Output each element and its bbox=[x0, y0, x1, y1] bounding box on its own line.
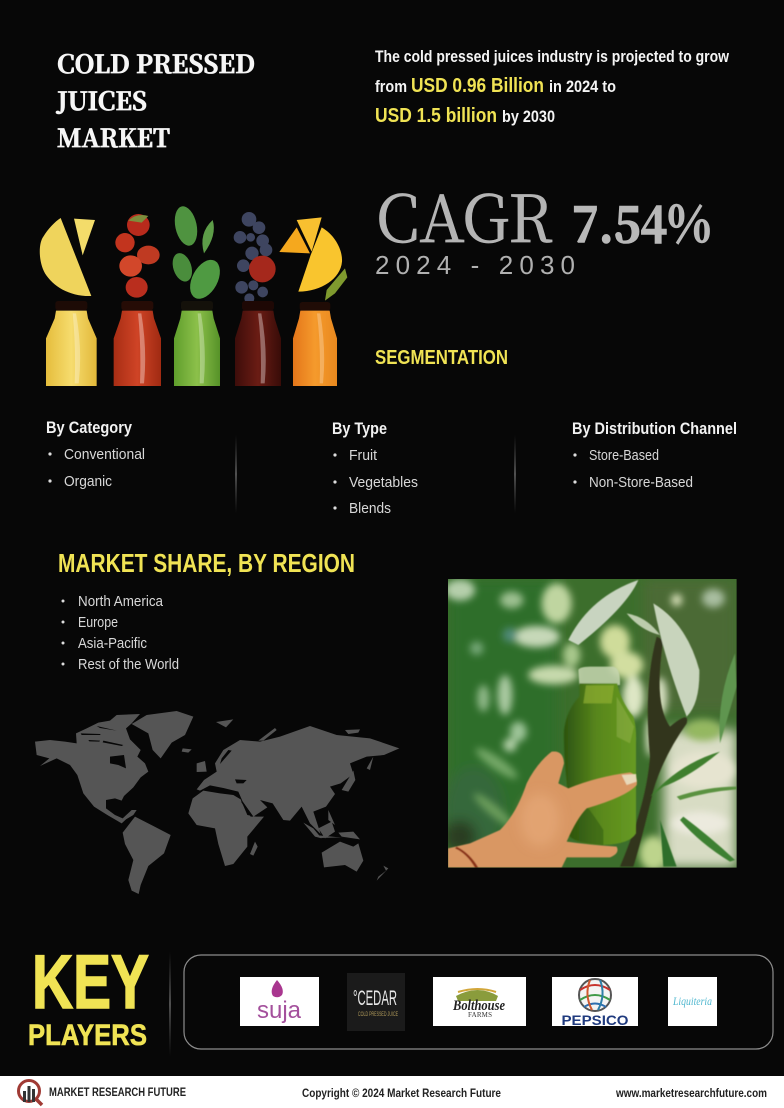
pineapple bottle bbox=[40, 218, 97, 386]
logo: liquiteria: Liquiteria bbox=[672, 994, 712, 1008]
north america bbox=[35, 714, 148, 823]
logo: cedar: °CEDAR bbox=[353, 987, 397, 1010]
intro text: from bbox=[375, 78, 407, 96]
intro text: USD 0.96 Billion bbox=[411, 75, 544, 97]
logo: bolthouse farms bbox=[433, 977, 526, 1026]
berry bottle bbox=[234, 212, 281, 386]
key players heading: PLAYERS bbox=[28, 1019, 147, 1052]
south america bbox=[123, 817, 171, 894]
illustration: juice bottles with fruit bbox=[40, 204, 347, 386]
intro text: in 2024 to bbox=[549, 78, 616, 96]
title: JUICES bbox=[56, 82, 147, 118]
segment: by type: Vegetables bbox=[349, 474, 418, 491]
key players heading bbox=[28, 940, 149, 1052]
region list: North America bbox=[78, 594, 164, 610]
title: COLD PRESSED bbox=[57, 45, 255, 81]
eurasia bbox=[197, 726, 399, 834]
copyright: Copyright © 2024 Market Research Future bbox=[302, 1086, 501, 1100]
africa bbox=[188, 791, 264, 866]
logo: pepsico: PEPSICO bbox=[562, 1013, 628, 1028]
logo: cedar bbox=[347, 973, 405, 1031]
region list bbox=[62, 594, 179, 673]
market share heading: MARKET SHARE, BY REGION bbox=[58, 548, 355, 578]
blurred foliage background bbox=[443, 579, 737, 871]
footer bbox=[0, 1076, 784, 1108]
segment: by category: Conventional bbox=[64, 446, 145, 463]
key players panel bbox=[184, 955, 773, 1049]
strawberry bottle bbox=[114, 214, 161, 386]
segment: by category: By Category bbox=[46, 418, 132, 437]
hand bbox=[448, 751, 637, 868]
intro text: by 2030 bbox=[502, 108, 555, 126]
title bbox=[56, 45, 255, 155]
segment: by distribution channel: By Distribution Channel bbox=[572, 419, 737, 438]
greenland bbox=[132, 711, 193, 758]
inland water and arctic channels bbox=[81, 726, 253, 817]
intro text: The cold pressed juices industry is projected to grow bbox=[375, 48, 729, 66]
logo: pepsico bbox=[552, 977, 638, 1028]
segment: by category: Organic bbox=[64, 473, 112, 490]
spinach bottle bbox=[169, 204, 226, 386]
segment: by type: Blends bbox=[349, 500, 391, 517]
CAGR callout bbox=[375, 167, 711, 280]
region list: Rest of the World bbox=[78, 657, 179, 673]
segment: by type bbox=[332, 419, 418, 517]
world map bbox=[35, 711, 399, 894]
segment: by distribution channel: Non-Store-Based bbox=[589, 474, 693, 491]
region list: Asia-Pacific bbox=[78, 636, 147, 652]
CAGR callout: 7.54% bbox=[572, 185, 711, 257]
segment: by category bbox=[46, 418, 145, 490]
palm leaves and trunk bbox=[568, 580, 737, 867]
logo: suja bbox=[240, 977, 319, 1026]
footer brand name: MARKET RESEARCH FUTURE bbox=[49, 1085, 186, 1099]
islands bbox=[182, 719, 388, 881]
segmentation heading: SEGMENTATION bbox=[375, 347, 508, 369]
intro text: USD 1.5 billion bbox=[375, 105, 497, 127]
australia bbox=[322, 842, 363, 872]
logo: cedar: COLD PRESSED JUICE bbox=[358, 1012, 398, 1018]
segment: by distribution channel: Store-Based bbox=[589, 447, 659, 464]
photo: hand holding green juice bbox=[443, 579, 737, 871]
intro text bbox=[375, 48, 729, 127]
region list: Europe bbox=[78, 615, 118, 631]
segment: by type: Fruit bbox=[349, 447, 378, 464]
orange bottle bbox=[279, 217, 347, 386]
segment: by distribution channel bbox=[572, 419, 737, 491]
green juice bottle bbox=[564, 667, 636, 845]
logo: suja: suja bbox=[257, 997, 302, 1024]
segment: by type: By Type bbox=[332, 419, 387, 438]
footer logo bbox=[18, 1080, 42, 1105]
logo: liquiteria bbox=[668, 977, 717, 1026]
logo: bolthouse farms: FARMS bbox=[468, 1011, 492, 1019]
logo: bolthouse farms: Bolthouse bbox=[452, 998, 505, 1014]
title: MARKET bbox=[57, 119, 170, 155]
CAGR callout: 2024 - 2030 bbox=[375, 250, 575, 280]
CAGR callout: CAGR bbox=[376, 167, 553, 261]
key players heading: KEY bbox=[32, 940, 149, 1025]
